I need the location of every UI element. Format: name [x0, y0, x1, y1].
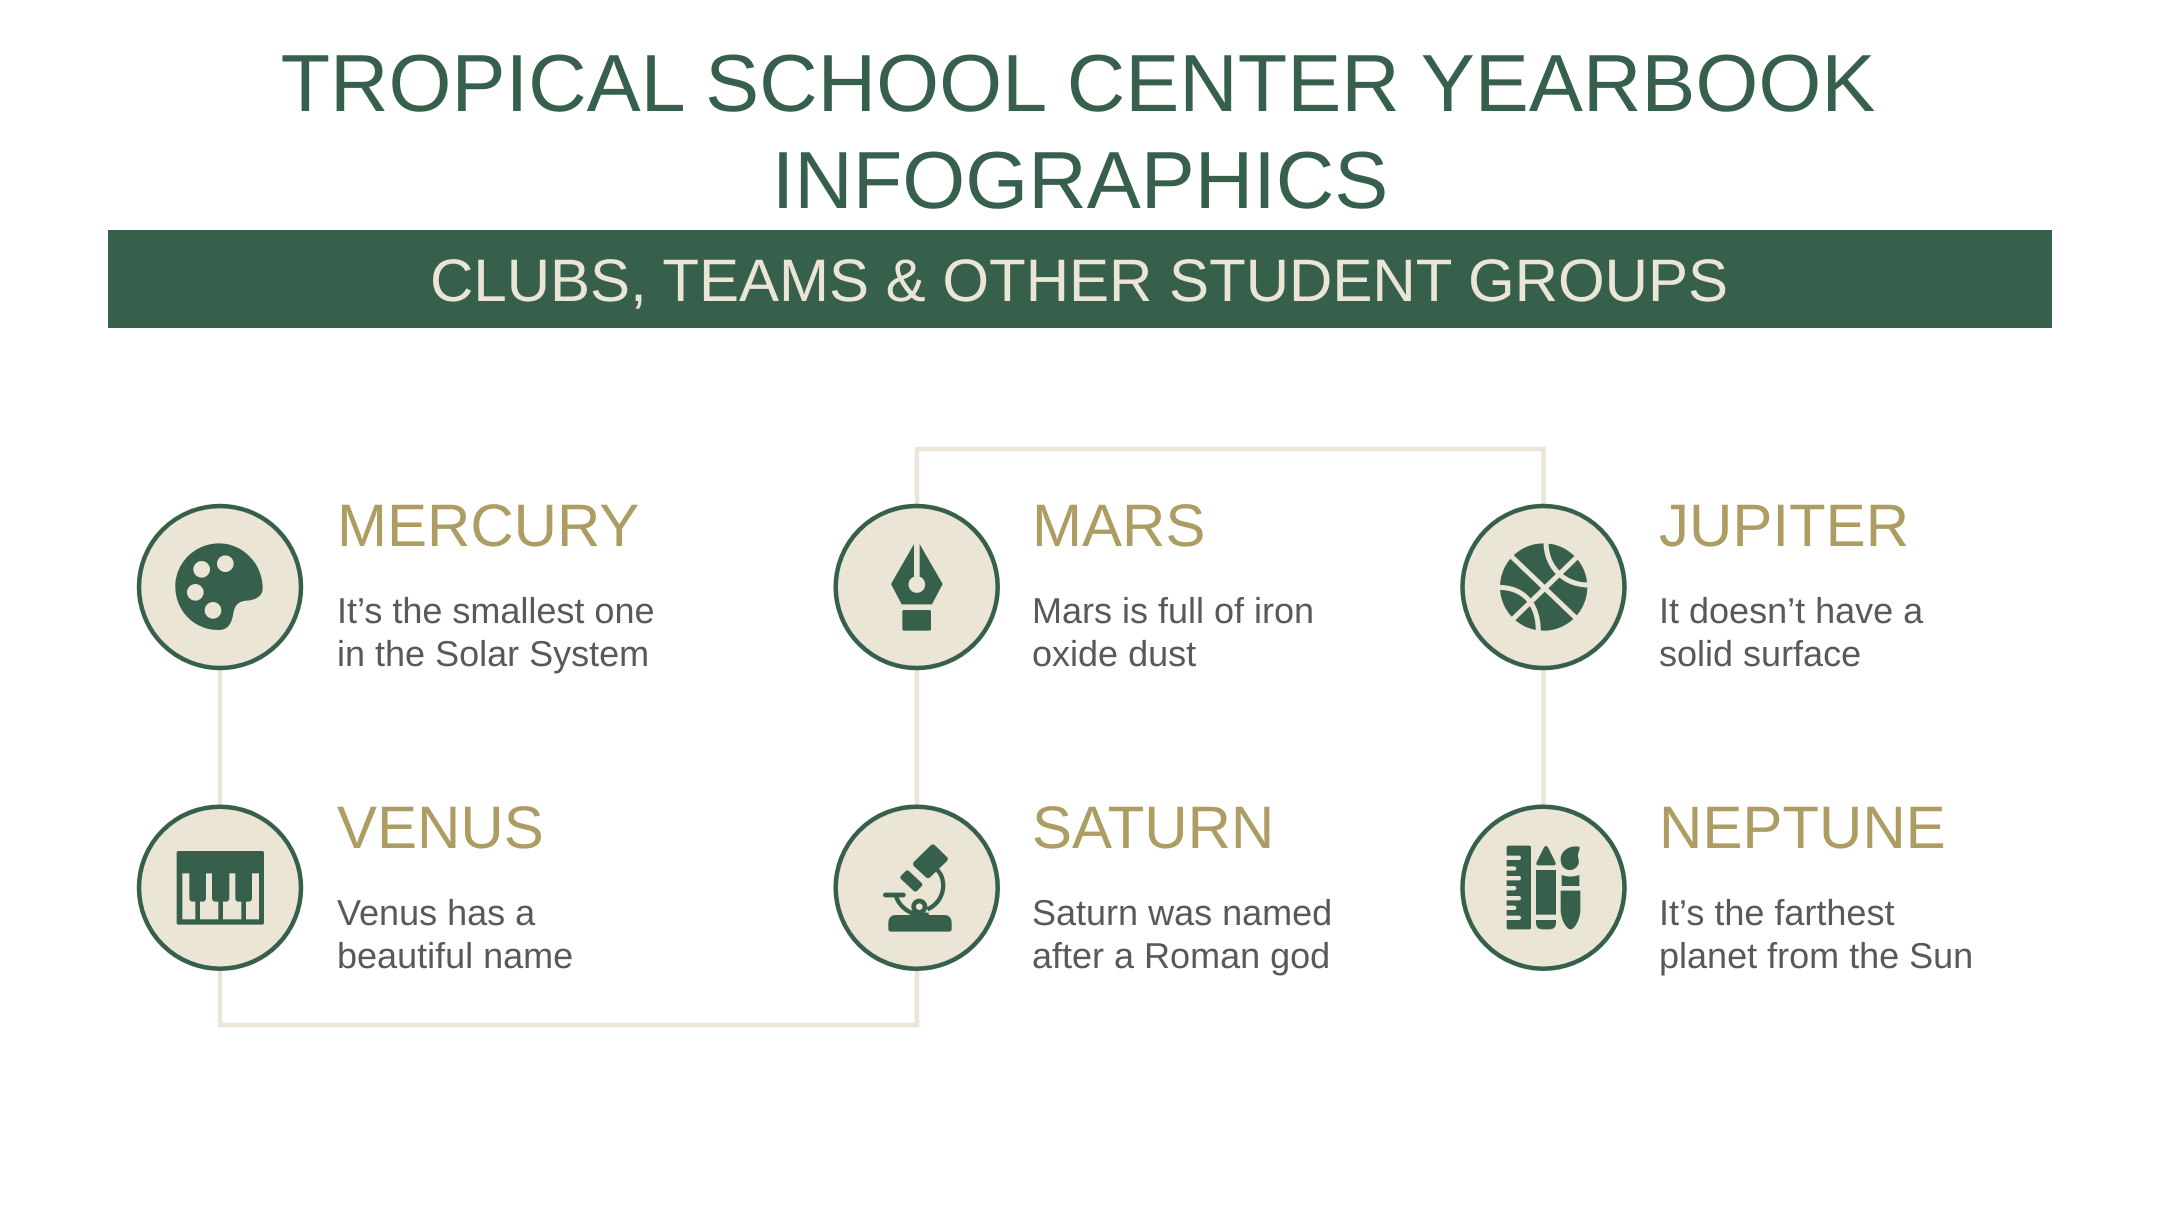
text: venus description	[337, 892, 573, 976]
text: venus description: beautiful name	[337, 935, 573, 976]
heading: jupiter: JUPITER	[1659, 492, 1909, 559]
title: INFOGRAPHICS	[772, 136, 1388, 226]
text: mars description: oxide dust	[1032, 633, 1196, 674]
panel: saturn	[836, 794, 1332, 976]
text: mars description	[1032, 590, 1314, 674]
panel: neptune	[1462, 794, 1973, 976]
text: mars description: Mars is full of iron	[1032, 590, 1314, 631]
text: neptune description: planet from the Sun	[1659, 935, 1973, 976]
subtitle banner	[108, 230, 2052, 328]
text: mercury description: It’s the smallest one	[337, 590, 654, 631]
heading: mars: MARS	[1032, 492, 1205, 559]
icon: ruler, pencil and brush	[1462, 807, 1624, 969]
icon: fountain pen nib	[836, 506, 998, 668]
text: venus description: Venus has a	[337, 892, 536, 933]
heading: venus: VENUS	[337, 794, 544, 861]
text: mercury description	[337, 590, 654, 674]
heading: neptune: NEPTUNE	[1659, 794, 1946, 861]
icon: basketball	[1462, 506, 1624, 668]
connector line	[220, 449, 1544, 1025]
text: neptune description: It’s the farthest	[1659, 892, 1894, 933]
text: jupiter description: It doesn’t have a	[1659, 590, 1924, 631]
heading: saturn: SATURN	[1032, 794, 1274, 861]
heading: mercury: MERCURY	[337, 492, 639, 559]
icon: microscope	[836, 807, 998, 969]
icon: piano keys	[139, 807, 301, 969]
panel: venus	[139, 794, 573, 976]
panel: jupiter	[1462, 492, 1924, 674]
text: mercury description: in the Solar System	[337, 633, 649, 674]
subtitle banner: CLUBS, TEAMS & OTHER STUDENT GROUPS	[430, 247, 1728, 314]
text: saturn description: after a Roman god	[1032, 935, 1330, 976]
text: neptune description	[1659, 892, 1973, 976]
title: TROPICAL SCHOOL CENTER YEARBOOK	[281, 39, 1875, 129]
text: saturn description	[1032, 892, 1332, 976]
text: jupiter description: solid surface	[1659, 633, 1861, 674]
text: saturn description: Saturn was named	[1032, 892, 1332, 933]
panel: mercury	[139, 492, 654, 674]
title	[281, 39, 1875, 226]
panel: mars	[836, 492, 1314, 674]
text: jupiter description	[1659, 590, 1924, 674]
icon: palette	[139, 506, 301, 668]
